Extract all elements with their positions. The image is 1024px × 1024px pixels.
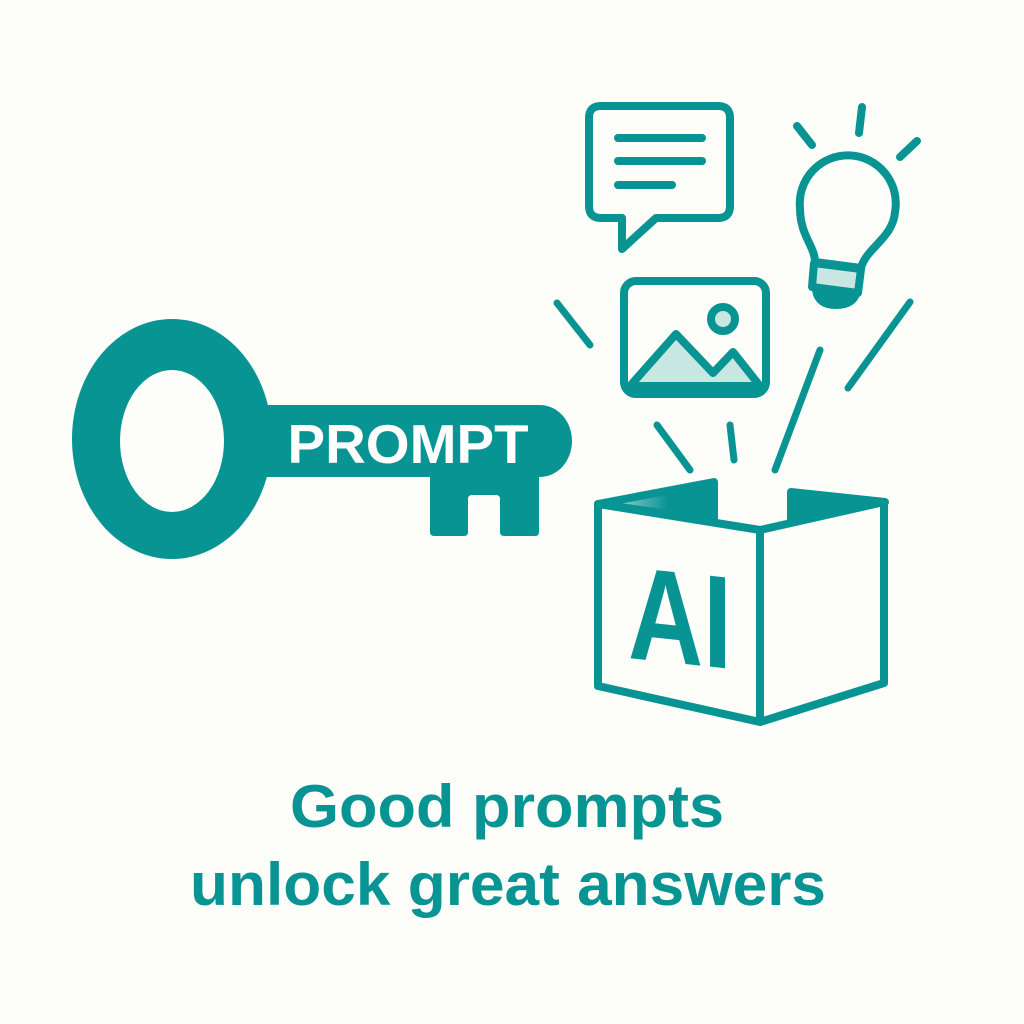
title: Good prompts bbox=[290, 773, 724, 840]
AI box bbox=[598, 482, 885, 722]
key bbox=[72, 319, 572, 559]
title: unlock great answers bbox=[190, 851, 826, 918]
icon: speech bubble bbox=[589, 106, 730, 249]
title bbox=[190, 773, 826, 918]
icon: image bbox=[624, 281, 766, 394]
box label: AI bbox=[628, 539, 732, 698]
rays bbox=[557, 302, 910, 470]
icon: light bulb bbox=[797, 107, 917, 305]
key label: PROMPT bbox=[288, 413, 528, 475]
